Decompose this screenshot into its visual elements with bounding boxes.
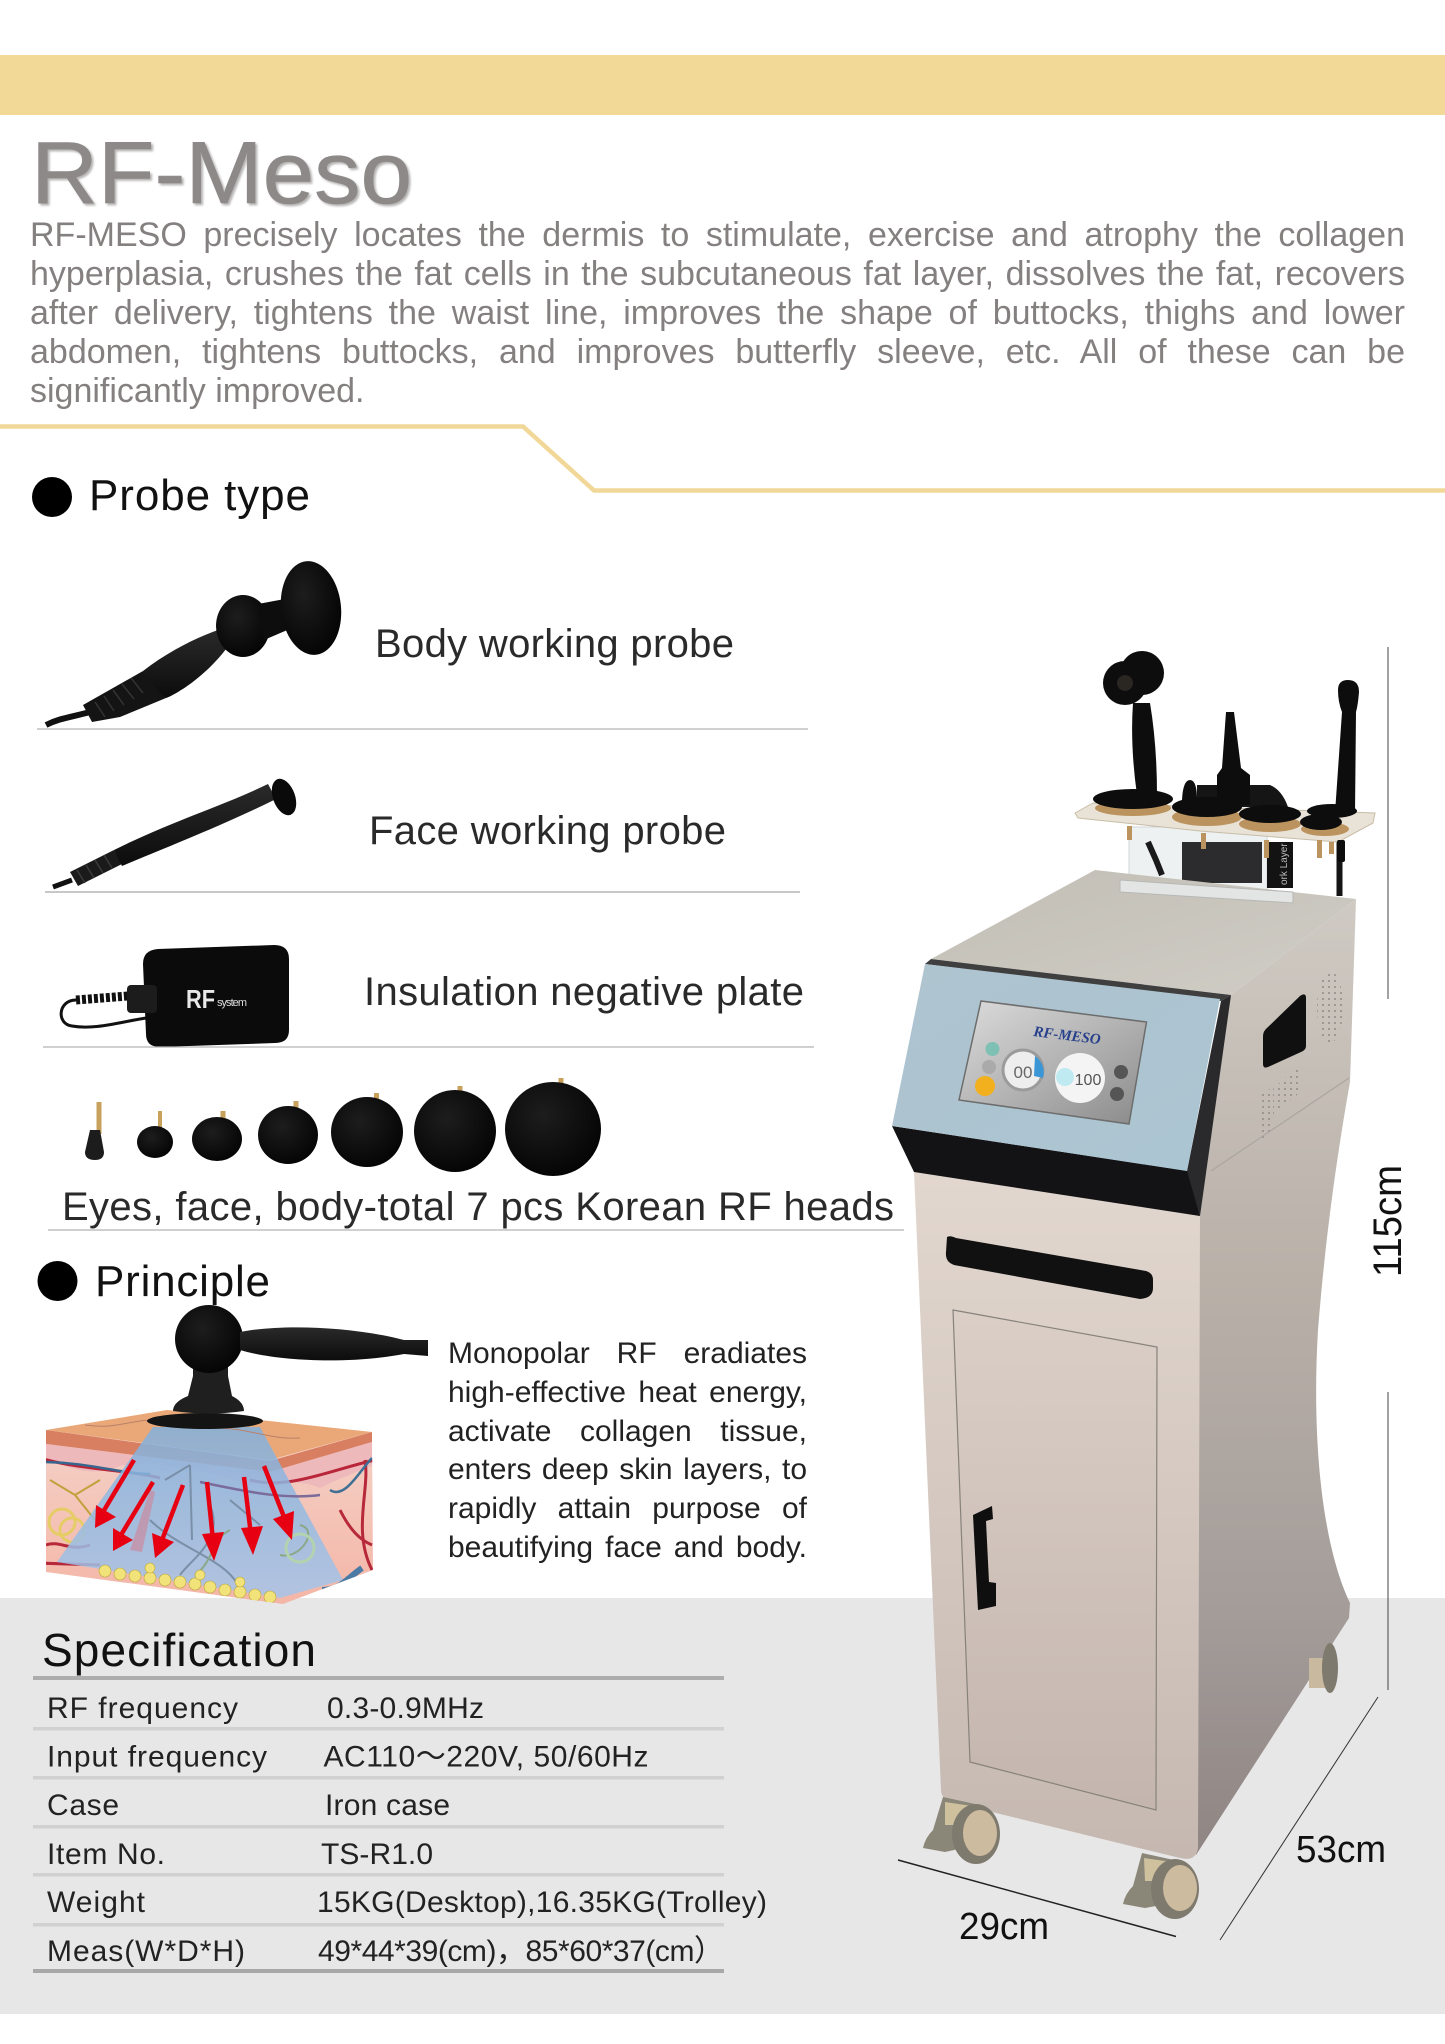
dimension: depth 53cm: 53cm bbox=[1296, 1829, 1386, 1871]
blue front panel bbox=[892, 964, 1220, 1171]
spec table text: Weight bbox=[47, 1886, 146, 1919]
dark top strip bbox=[925, 959, 1231, 1001]
label: RF heads: Eyes, face, body-total 7 pcs Korean RF heads bbox=[62, 1185, 894, 1229]
specification grey panel background bbox=[0, 1598, 1445, 2014]
spec table text: Input frequency bbox=[47, 1740, 267, 1774]
spec table text: 15KG(Desktop),16.35KG(Trolley) bbox=[317, 1886, 767, 1919]
intro paragraph: RF-MESO precisely locates the dermis to stimulate, exercise and atrophy the collagen bbox=[30, 216, 1405, 254]
acrylic base on lid bbox=[1120, 880, 1293, 903]
door handle bbox=[973, 1506, 996, 1610]
cabinet door bbox=[953, 1310, 1157, 1810]
label: body working probe: Body working probe bbox=[375, 622, 734, 666]
probe tray with probes bbox=[1075, 651, 1375, 896]
front left wheel bbox=[923, 1797, 1000, 1864]
black lower front bbox=[892, 1126, 1200, 1216]
spec table text: TS-R1.0 bbox=[321, 1838, 433, 1871]
label: insulation negative plate: Insulation negative plate bbox=[364, 970, 804, 1014]
spec table text: Meas(W*D*H) bbox=[47, 1935, 245, 1968]
touch screen: RF-MESO bbox=[1032, 1024, 1102, 1048]
dark right strip bbox=[1187, 995, 1231, 1216]
probe on skin bbox=[147, 1305, 428, 1429]
icon: insulation negative plate: RF bbox=[186, 984, 215, 1014]
icon: body working probe bbox=[46, 558, 346, 725]
spec table text: Iron case bbox=[325, 1789, 450, 1822]
spec table text bbox=[47, 1692, 767, 1968]
spec table text: Item No. bbox=[47, 1838, 165, 1871]
icon: insulation negative plate: system bbox=[217, 997, 247, 1009]
heading: principle: Principle bbox=[95, 1257, 270, 1306]
icon: seven RF heads bbox=[85, 1078, 601, 1176]
top yellow band bbox=[0, 55, 1445, 115]
principle description bbox=[448, 1337, 807, 1564]
spec table text: RF frequency bbox=[47, 1692, 238, 1725]
intro paragraph: significantly improved. bbox=[30, 372, 364, 410]
side handle recess bbox=[1263, 994, 1306, 1068]
table rules bbox=[33, 1676, 724, 1973]
cabinet front bbox=[914, 1172, 1200, 1859]
dimension: height 115cm: 115cm bbox=[1366, 1165, 1410, 1277]
dimension: width 29cm bbox=[898, 1860, 1176, 1948]
title: RF-Meso bbox=[31, 123, 412, 222]
top drawer handle bbox=[946, 1236, 1153, 1299]
back wheel bbox=[1309, 1643, 1338, 1693]
specification heading: Specification bbox=[42, 1624, 316, 1676]
front right wheel bbox=[1123, 1853, 1199, 1919]
principle description: activate collagen tissue, bbox=[448, 1415, 807, 1448]
intro paragraph: hyperplasia, crushes the fat cells in the subcutaneous fat layer, dissolves the fat, recovers bbox=[30, 255, 1405, 293]
spec table text: AC110～220V, 50/60Hz bbox=[324, 1740, 648, 1774]
gold divider line bbox=[0, 426, 1445, 490]
spec table text: Case bbox=[47, 1789, 119, 1822]
top lid bbox=[931, 870, 1356, 995]
side of machine bbox=[1188, 899, 1356, 1855]
principle description: enters deep skin layers, to bbox=[448, 1453, 807, 1486]
icon: insulation negative plate bbox=[61, 945, 289, 1047]
illustration: skin block with probe and RF arrows bbox=[36, 1305, 428, 1604]
intro paragraph: after delivery, tightens the waist line, improves the shape of buttocks, thighs and lower bbox=[30, 294, 1405, 332]
principle description: beautifying face and body. bbox=[448, 1531, 807, 1564]
label: face working probe: Face working probe bbox=[369, 809, 726, 853]
spec table text: 0.3-0.9MHz bbox=[327, 1692, 484, 1725]
touch screen bbox=[959, 1001, 1146, 1124]
device: RF-Meso machine bbox=[892, 651, 1375, 1919]
speaker and vents bbox=[1261, 971, 1343, 1140]
intro paragraph bbox=[30, 216, 1405, 410]
heading: probe type: Probe type bbox=[89, 471, 310, 520]
principle description: rapidly attain purpose of bbox=[448, 1492, 807, 1525]
principle description: Monopolar RF eradiates bbox=[448, 1337, 807, 1370]
intro paragraph: abdomen, tightens buttocks, and improves butterfly sleeve, etc. All of these can be bbox=[30, 333, 1405, 371]
spec table text: 49*44*39(cm)，85*60*37(cm） bbox=[318, 1935, 724, 1968]
dimension: width 29cm: 29cm bbox=[959, 1906, 1049, 1948]
probe tray with probes: ork Layer bbox=[1279, 843, 1290, 885]
touch screen: 00 bbox=[1014, 1063, 1032, 1082]
principle description: high-effective heat energy, bbox=[448, 1376, 807, 1409]
touch screen: 100 bbox=[1075, 1072, 1101, 1089]
icon: face working probe bbox=[53, 775, 301, 887]
dimension: depth 53cm bbox=[1220, 1697, 1386, 1940]
